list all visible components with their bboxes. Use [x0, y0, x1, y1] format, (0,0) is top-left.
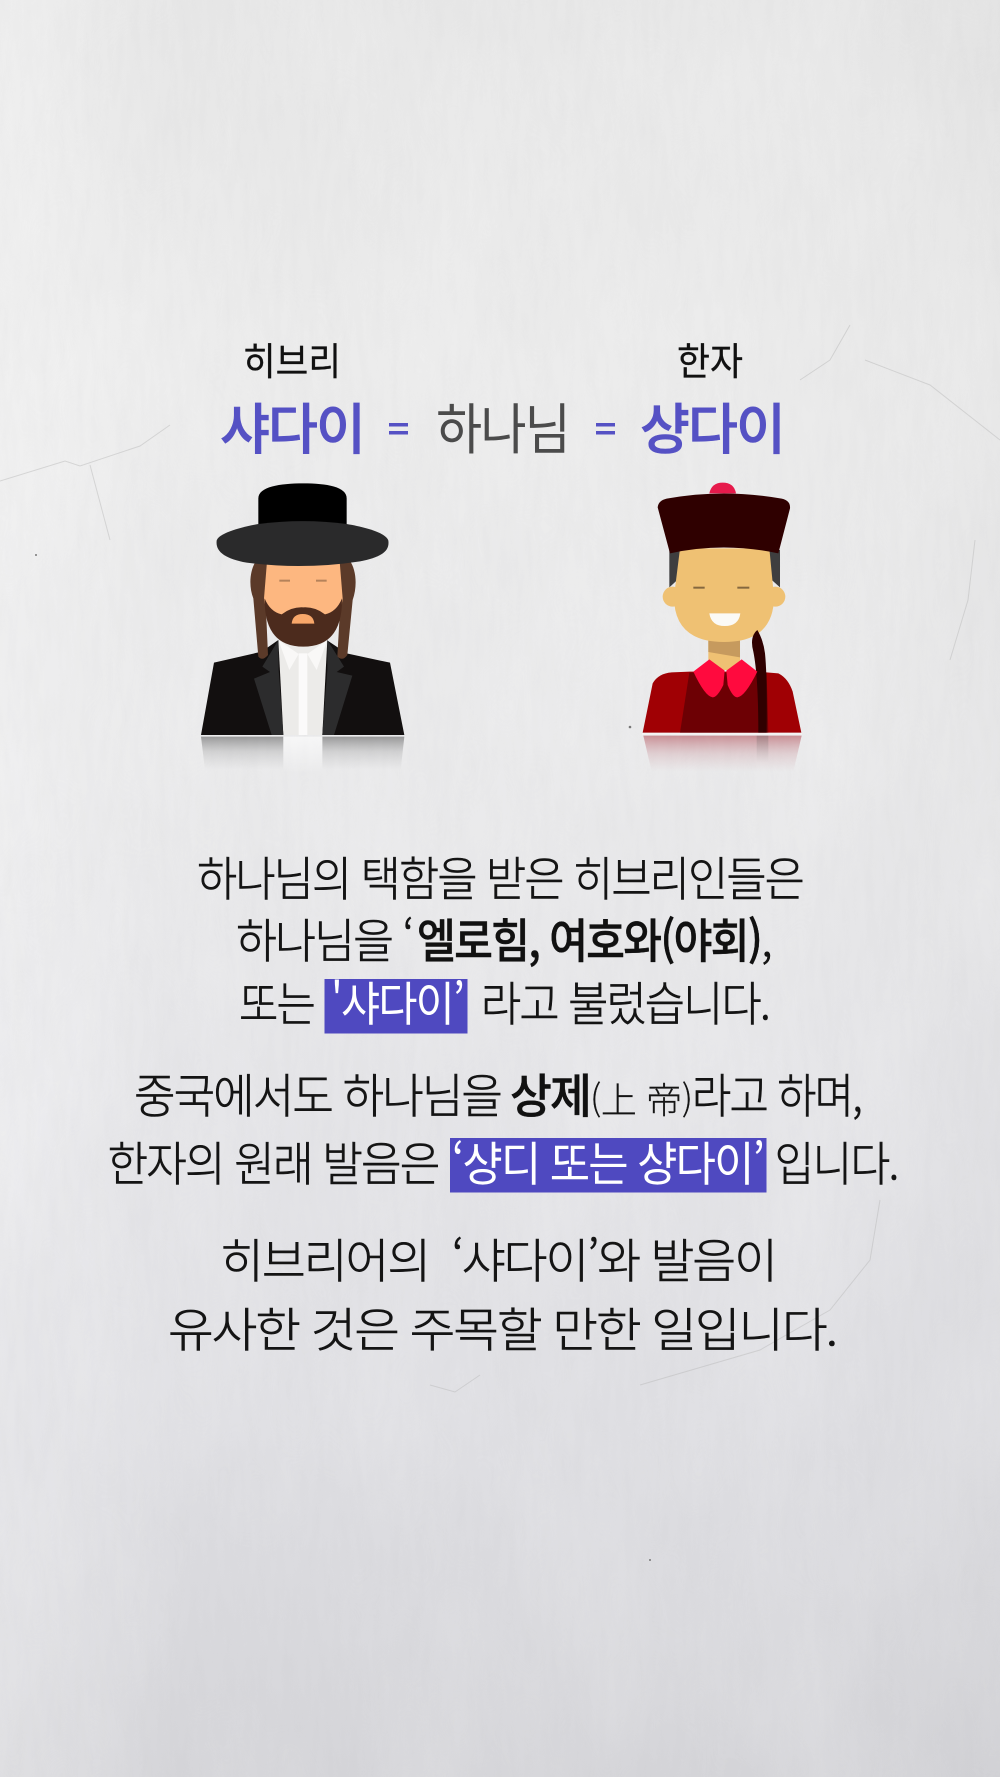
hat brim [217, 521, 389, 566]
heading: Hebrew label: 히브리 [243, 331, 341, 386]
figure: Chinese man with red robe [642, 483, 802, 772]
line 1: 하나님의 택함을 받은 히브리인들은 [197, 841, 803, 910]
figure: Hebrew man with black hat [201, 483, 404, 773]
text block: first paragraph [197, 841, 803, 1035]
text block: second paragraph [108, 1058, 898, 1195]
highlight: Shaddai: '샤다이’ [331, 966, 463, 1035]
line 3 with highlight: 또는 [239, 966, 314, 1035]
line 2: 엘로힘, 여호와(야회) [417, 903, 761, 972]
hat [658, 493, 790, 553]
line 4: 중국에서도 하나님을 [134, 1058, 501, 1127]
reflection [643, 736, 802, 772]
term: God: 하나님 [436, 385, 569, 465]
lapels [254, 640, 352, 735]
eyes [693, 585, 749, 591]
line 4: 라고 하며, [692, 1058, 861, 1127]
beard [265, 598, 342, 647]
equals sign left [389, 423, 408, 434]
equation row: Shaddai = God = Shangdai [220, 385, 784, 465]
jacket [201, 640, 404, 735]
text block: third paragraph [168, 1223, 836, 1361]
line 2 [236, 903, 771, 972]
line 2: 하나님을 ‘ [236, 903, 412, 972]
hair and side locks [250, 560, 356, 659]
term: Shaddai: 샤다이 [220, 385, 364, 465]
heading: Chinese character label: 한자 [677, 331, 743, 386]
line 4: (上 帝) [590, 1072, 693, 1124]
smile [709, 613, 740, 626]
line 6: 히브리어의 ‘샤다이’와 발음이 [220, 1223, 776, 1292]
term: Shangdai: 샹다이 [640, 385, 784, 465]
face [264, 557, 343, 627]
equals sign right [596, 423, 615, 434]
vest [680, 673, 768, 733]
line 5 with highlight: 한자의 원래 발음은 [108, 1126, 438, 1195]
neck [708, 637, 740, 670]
hat crown [258, 483, 347, 527]
line 4: 상제 [510, 1058, 590, 1127]
shirt [278, 640, 327, 735]
face with ears [663, 548, 785, 642]
ground line [642, 733, 802, 735]
reflection [201, 737, 404, 773]
highlight: Shangdi or Shangdai: ‘샹디 또는 샹다이’ [452, 1126, 763, 1195]
mouth [292, 614, 314, 624]
line 7: 유사한 것은 주목할 만한 일입니다. [168, 1292, 836, 1361]
pompom [709, 483, 736, 493]
robe [643, 672, 801, 733]
line 5 with highlight [108, 1126, 898, 1195]
line 3 with highlight: 라고 불렀습니다. [481, 966, 769, 1035]
line 4 [134, 1058, 861, 1127]
line 2: , [761, 903, 771, 972]
line 5 with highlight: 입니다. [774, 1126, 898, 1195]
queue braid [752, 630, 767, 733]
eyes [279, 578, 327, 584]
side hair [669, 550, 780, 587]
line 3 with highlight [239, 966, 769, 1035]
collar [693, 659, 757, 697]
